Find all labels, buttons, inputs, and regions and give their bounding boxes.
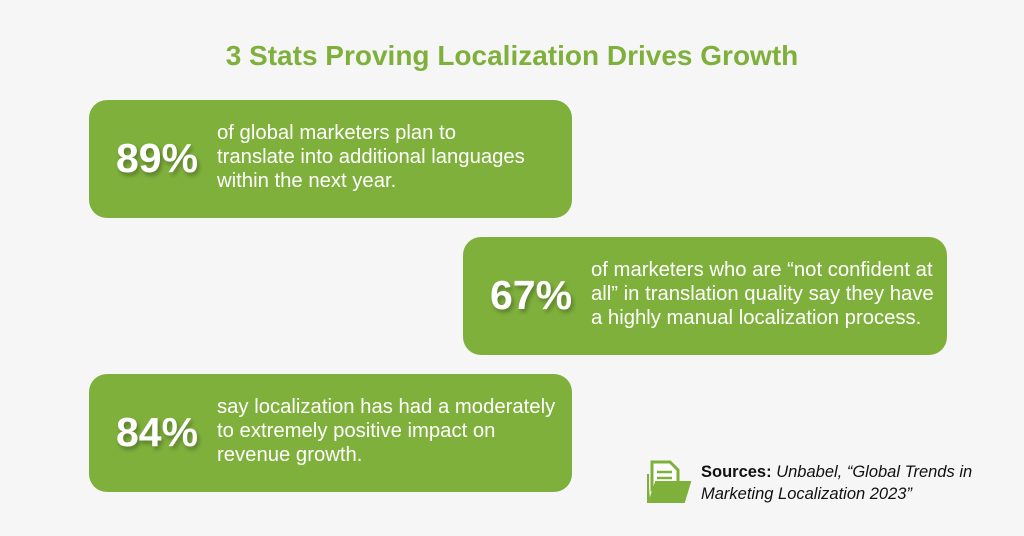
panel: stat 89% [89, 100, 572, 218]
sources text: Marketing Localization 2023” [701, 485, 912, 503]
stat text: of marketers who are “not confident at [591, 259, 933, 281]
sources text [701, 463, 972, 503]
stat number: 89% [116, 135, 198, 181]
icon: folder [647, 460, 692, 503]
stat text: to extremely positive impact on [217, 420, 495, 442]
stat number: 67% [490, 272, 572, 318]
stat text: of global marketers plan to [217, 122, 456, 144]
stat text: a highly manual localization process. [591, 307, 921, 329]
stat number: 84% [116, 409, 198, 455]
stat text [217, 122, 525, 192]
stat text: translate into additional languages [217, 146, 525, 168]
stat text: all” in translation quality say they have [591, 283, 934, 305]
title: 3 Stats Proving Localization Drives Growth [226, 40, 798, 71]
stat text [217, 396, 556, 466]
stat text [591, 259, 934, 329]
stat text: say localization has had a moderately [217, 396, 555, 418]
stat text: within the next year. [217, 170, 396, 192]
sources text: Sources: Unbabel, “Global Trends in [701, 463, 972, 481]
panel: stat 67% [463, 237, 947, 355]
panel: stat 84% [89, 374, 572, 492]
stat text: revenue growth. [217, 444, 362, 466]
